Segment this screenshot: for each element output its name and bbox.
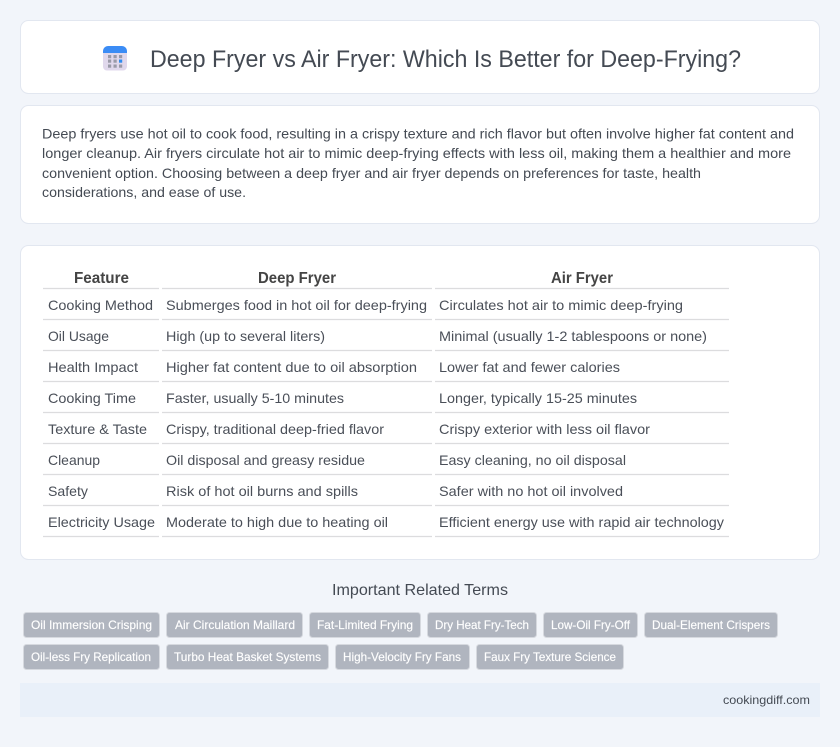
table header: Feature (74, 270, 129, 287)
table header: Air Fryer (551, 270, 613, 287)
row: electricity usage: Moderate to high due to heating oil (166, 514, 388, 530)
tag (24, 612, 160, 638)
row: texture and taste: Crispy, traditional deep-fried flavor (166, 421, 384, 437)
related term tags (24, 612, 778, 670)
row: cooking time: Longer, typically 15-25 minutes (439, 390, 637, 406)
tag (336, 644, 470, 670)
text block: introduction: longer cleanup. Air fryers circulate hot air to mimic deep-frying effects with less oil, making them a healthier and more (42, 145, 791, 161)
tag: Oil-less Fry Replication (31, 650, 151, 664)
row: health impact (48, 359, 620, 375)
tag (544, 612, 638, 638)
tag: Fat-Limited Frying (317, 618, 413, 632)
row: cleanup: Oil disposal and greasy residue (166, 452, 365, 468)
row: cleanup: Cleanup (48, 452, 100, 468)
row: cooking method: Submerges food in hot oil for deep-frying (166, 297, 427, 313)
row: electricity usage: Efficient energy use with rapid air technology (439, 514, 724, 530)
row: texture and taste (48, 421, 650, 437)
row: health impact: Health Impact (48, 359, 138, 375)
panel: comparison table (20, 246, 820, 560)
row: oil usage: Oil Usage (48, 328, 109, 344)
row: health impact: Lower fat and fewer calories (439, 359, 620, 375)
icon: calendar (103, 46, 127, 70)
row: oil usage: High (up to several liters) (166, 328, 325, 344)
heading: related terms: Important Related Terms (332, 582, 508, 599)
tag: Oil Immersion Crisping (31, 618, 152, 632)
row: safety: Risk of hot oil burns and spills (166, 483, 358, 499)
row: cooking time: Faster, usually 5-10 minutes (166, 390, 344, 406)
row: cooking time: Cooking Time (48, 390, 136, 406)
tag (166, 644, 328, 670)
table header (74, 270, 613, 287)
tag: Faux Fry Texture Science (484, 650, 616, 664)
tag (24, 644, 160, 670)
row: health impact: Higher fat content due to oil absorption (166, 359, 417, 375)
row: cleanup (48, 452, 626, 468)
text block: introduction: Deep fryers use hot oil to cook food, resulting in a crispy texture and rich flavor but often involve higher fat content and (42, 126, 794, 142)
tag: Dry Heat Fry-Tech (435, 618, 529, 632)
tag: Dual-Element Crispers (652, 618, 770, 632)
panel: introduction (20, 106, 820, 224)
row: texture and taste: Texture & Taste (48, 421, 147, 437)
row: cooking method: Circulates hot air to mimic deep-frying (439, 297, 683, 313)
tag (166, 612, 302, 638)
row: cooking time (48, 390, 637, 406)
row: electricity usage: Electricity Usage (48, 514, 155, 530)
panel: title (20, 20, 820, 94)
text block: introduction (42, 126, 794, 200)
row: safety: Safer with no hot oil involved (439, 483, 623, 499)
text block: introduction: considerations, and ease of use. (42, 184, 246, 200)
tag: Low-Oil Fry-Off (551, 618, 631, 632)
row: electricity usage (48, 514, 724, 530)
tag (644, 612, 778, 638)
title: Deep Fryer vs Air Fryer: Which Is Better for Deep-Frying? (150, 46, 741, 73)
row: texture and taste: Crispy exterior with less oil flavor (439, 421, 650, 437)
tag: Air Circulation Maillard (175, 618, 295, 632)
text block: introduction: convenient option. Choosing between a deep fryer and air fryer depends on preferences for taste, health (42, 165, 701, 181)
tag (476, 644, 624, 670)
row: safety (48, 483, 623, 499)
tag: High-Velocity Fry Fans (343, 650, 461, 664)
tag (428, 612, 536, 638)
row: oil usage: Minimal (usually 1-2 tablespoons or none) (439, 328, 707, 344)
row: cooking method (48, 297, 683, 313)
row: cooking method: Cooking Method (48, 297, 153, 313)
table header: Deep Fryer (258, 270, 336, 287)
footer: cookingdiff.com (723, 693, 810, 707)
footer (20, 683, 820, 717)
row: safety: Safety (48, 483, 88, 499)
row: cleanup: Easy cleaning, no oil disposal (439, 452, 626, 468)
tag (310, 612, 420, 638)
tag: Turbo Heat Basket Systems (174, 650, 321, 664)
row: oil usage (48, 328, 707, 344)
